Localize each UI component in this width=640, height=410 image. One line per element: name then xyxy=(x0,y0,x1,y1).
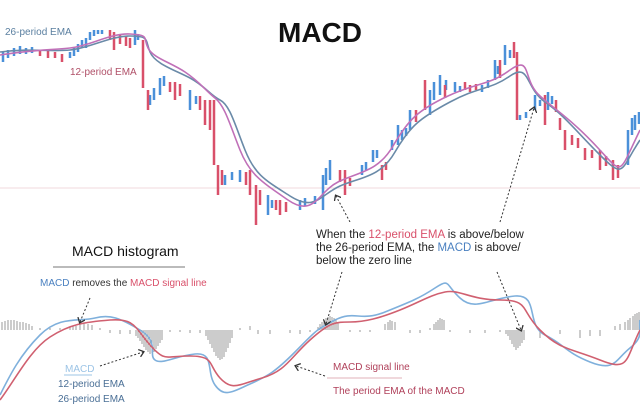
legend: MACD: 26-period EMA xyxy=(58,394,125,405)
price candles xyxy=(3,30,639,225)
legend: MACD: MACD xyxy=(65,364,94,375)
label: 12-period EMA: 12-period EMA xyxy=(70,67,137,78)
histogram xyxy=(2,312,639,360)
arrow: MACD label xyxy=(100,352,143,366)
price grid line xyxy=(0,187,640,189)
EMA lines xyxy=(0,34,640,206)
legend: MACD: 12-period EMA xyxy=(58,379,125,390)
arrow: signal line xyxy=(296,366,325,376)
legend: signal line xyxy=(327,362,465,397)
text: MACD removes signal line: MACD removes the MACD signal line xyxy=(40,278,207,289)
legend: signal line: The period EMA of the MACD xyxy=(333,386,465,397)
legend: MACD xyxy=(58,364,125,405)
callout xyxy=(310,222,524,267)
arrow: zero cross right xyxy=(497,272,521,330)
heading: MACD histogram xyxy=(53,238,185,268)
arrow: histogram xyxy=(80,298,90,322)
callout: the 26-period EMA, the MACD is above/ xyxy=(316,242,521,254)
label: 26-period EMA: 26-period EMA xyxy=(5,27,72,38)
callout: When the 12-period EMA is above/below xyxy=(316,229,524,241)
MACD lines xyxy=(0,283,640,400)
title: MACD xyxy=(278,17,362,48)
legend: signal line: MACD signal line xyxy=(333,362,410,373)
arrow: to price crossover left xyxy=(336,196,350,222)
heading: MACD histogram: MACD histogram xyxy=(72,243,179,259)
callout: below the zero line xyxy=(316,255,412,267)
arrow: to price crossover right xyxy=(500,108,534,222)
arrow: zero cross middle xyxy=(326,272,342,324)
